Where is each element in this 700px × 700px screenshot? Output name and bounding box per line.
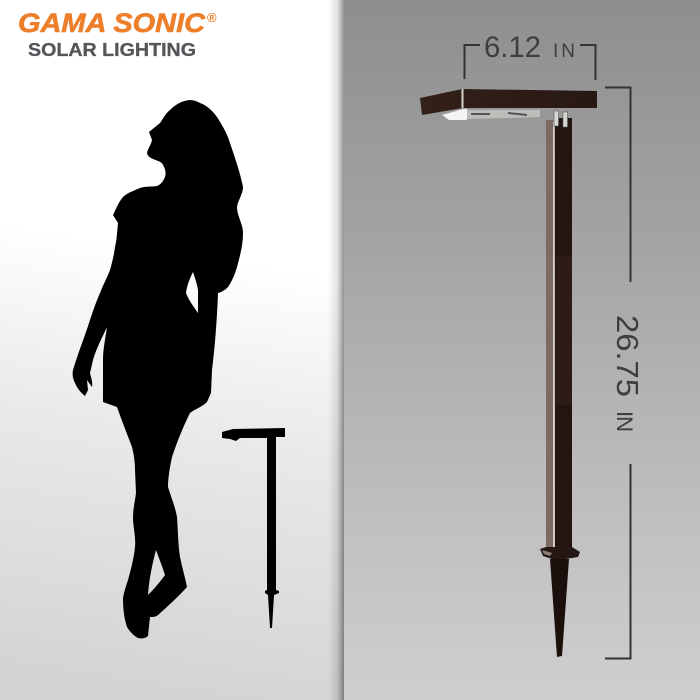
panel: right background <box>344 0 700 700</box>
lamp post highlight <box>553 122 554 550</box>
dimension: width label: 6.12 <box>484 31 541 64</box>
logo wordmark: GAMA SONIC <box>18 8 206 38</box>
lamp post dark side <box>555 118 572 550</box>
lamp: main product <box>420 89 597 657</box>
ground stake <box>550 559 569 657</box>
dimension: height label: 26.75 <box>610 315 645 397</box>
logo tagline: SOLAR LIGHTING <box>28 40 196 60</box>
dimension: height unit: IN <box>612 411 637 432</box>
registered mark: ® <box>207 10 217 25</box>
divider shadow <box>328 0 344 700</box>
dimension: height bracket <box>605 88 630 658</box>
logo: Gama Sonic Solar Lighting <box>18 8 217 60</box>
mounting bolts <box>554 111 568 127</box>
lamp LED lens <box>442 109 467 120</box>
dimension: width bracket <box>464 45 596 80</box>
silhouette: woman <box>73 100 243 638</box>
dimension: width unit: IN <box>553 41 575 62</box>
lamp post lit side <box>546 120 553 550</box>
solar panel top <box>420 89 597 115</box>
panel: left background <box>0 0 344 700</box>
small lamp silhouette <box>222 428 285 628</box>
stake flange <box>540 547 580 559</box>
lamp head bracket <box>467 110 540 119</box>
